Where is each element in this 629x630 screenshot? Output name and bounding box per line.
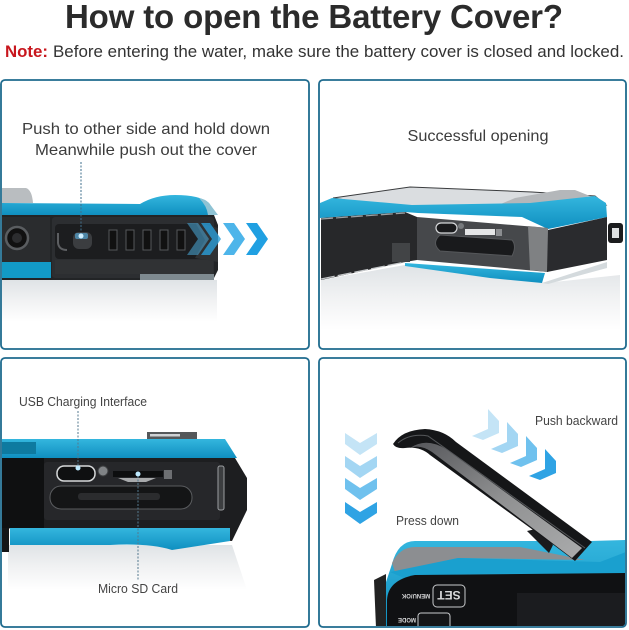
leader: Micro SD Card: Micro SD Card bbox=[98, 581, 178, 596]
panel: push to other side bbox=[1, 80, 309, 349]
leader line to latch bbox=[78, 162, 84, 238]
camera port close-up bbox=[2, 432, 247, 590]
note line: Before entering the water, make sure the battery cover is closed and locked. bbox=[53, 42, 624, 61]
arrows: pull right chevrons bbox=[187, 223, 268, 255]
label: push backward: Push backward bbox=[535, 413, 618, 428]
camera back with raised cover: MENU/OK bbox=[401, 592, 430, 598]
panel: successful opening bbox=[319, 80, 626, 349]
leader: USB Charging Interface: USB Charging Interface bbox=[19, 394, 147, 409]
panel: ports bbox=[1, 358, 309, 627]
arrows: press down bbox=[345, 433, 377, 524]
camera back with raised cover bbox=[374, 540, 627, 630]
arrows: push backward bbox=[472, 409, 556, 480]
camera with open cover bbox=[320, 186, 623, 312]
instruction text: Push to other side and hold down bbox=[22, 121, 270, 138]
note line: Note: bbox=[5, 42, 48, 61]
leader: USB Charging Interface bbox=[19, 394, 147, 470]
raised battery cover bbox=[393, 429, 592, 561]
panel: press down and push backward bbox=[319, 358, 627, 630]
instruction text: Meanwhile push out the cover bbox=[35, 142, 258, 159]
instruction text bbox=[22, 121, 270, 159]
camera side view with latch bbox=[2, 188, 218, 322]
camera back with raised cover: SET bbox=[437, 588, 461, 602]
heading: successful opening: Successful opening bbox=[408, 128, 548, 145]
camera back with raised cover: MODE bbox=[398, 616, 416, 622]
leader: Micro SD Card bbox=[98, 472, 178, 596]
label: press down: Press down bbox=[396, 513, 459, 528]
